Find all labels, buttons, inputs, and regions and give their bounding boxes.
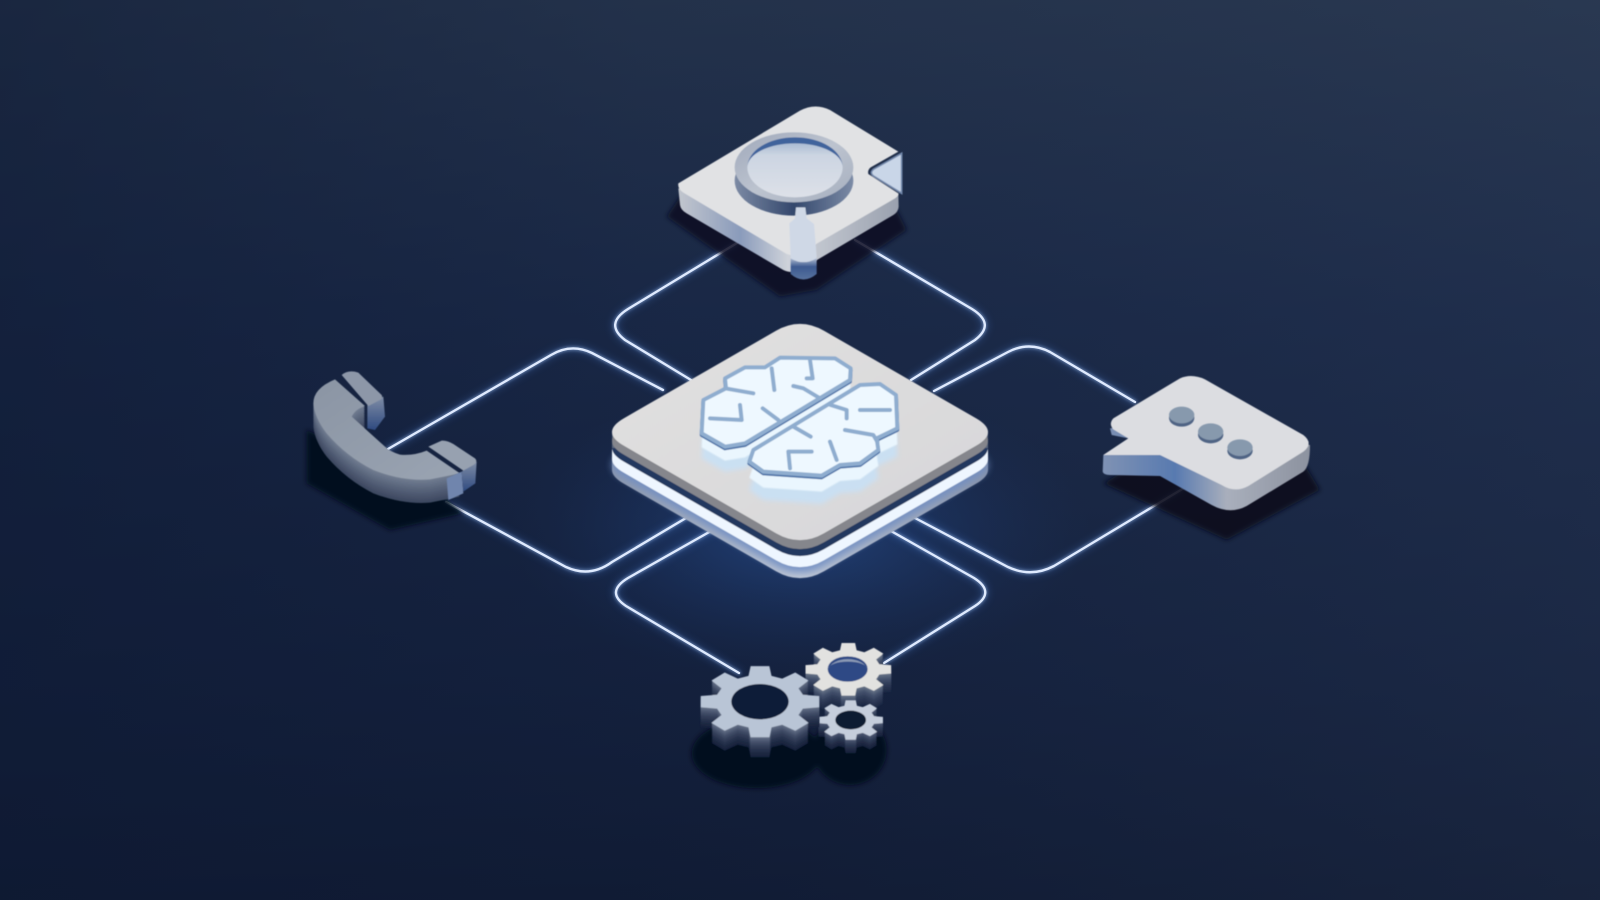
shadow bbox=[667, 197, 907, 297]
three dots bbox=[1169, 407, 1253, 459]
medium gear bbox=[806, 643, 891, 714]
node: phone bbox=[307, 371, 477, 530]
central platform bbox=[612, 324, 988, 578]
speech bubble body bbox=[1103, 376, 1310, 510]
small gear bbox=[818, 700, 883, 753]
node: chat bubble bbox=[1103, 376, 1320, 540]
connector lines bbox=[388, 240, 1184, 673]
shadow bbox=[1103, 457, 1320, 540]
phone mouthpiece cap bbox=[428, 441, 477, 500]
shadow bbox=[692, 715, 887, 788]
large gear bbox=[701, 666, 819, 757]
node: search bbox=[667, 106, 907, 297]
platform base bbox=[612, 324, 988, 578]
icon: glowing brain bbox=[702, 358, 897, 504]
shadow bbox=[307, 430, 463, 530]
search base plate bbox=[678, 106, 902, 272]
node: gears bbox=[692, 643, 891, 788]
phone earpiece cap bbox=[342, 371, 385, 430]
magnifying glass bbox=[735, 132, 853, 279]
phone handset bbox=[313, 379, 460, 503]
